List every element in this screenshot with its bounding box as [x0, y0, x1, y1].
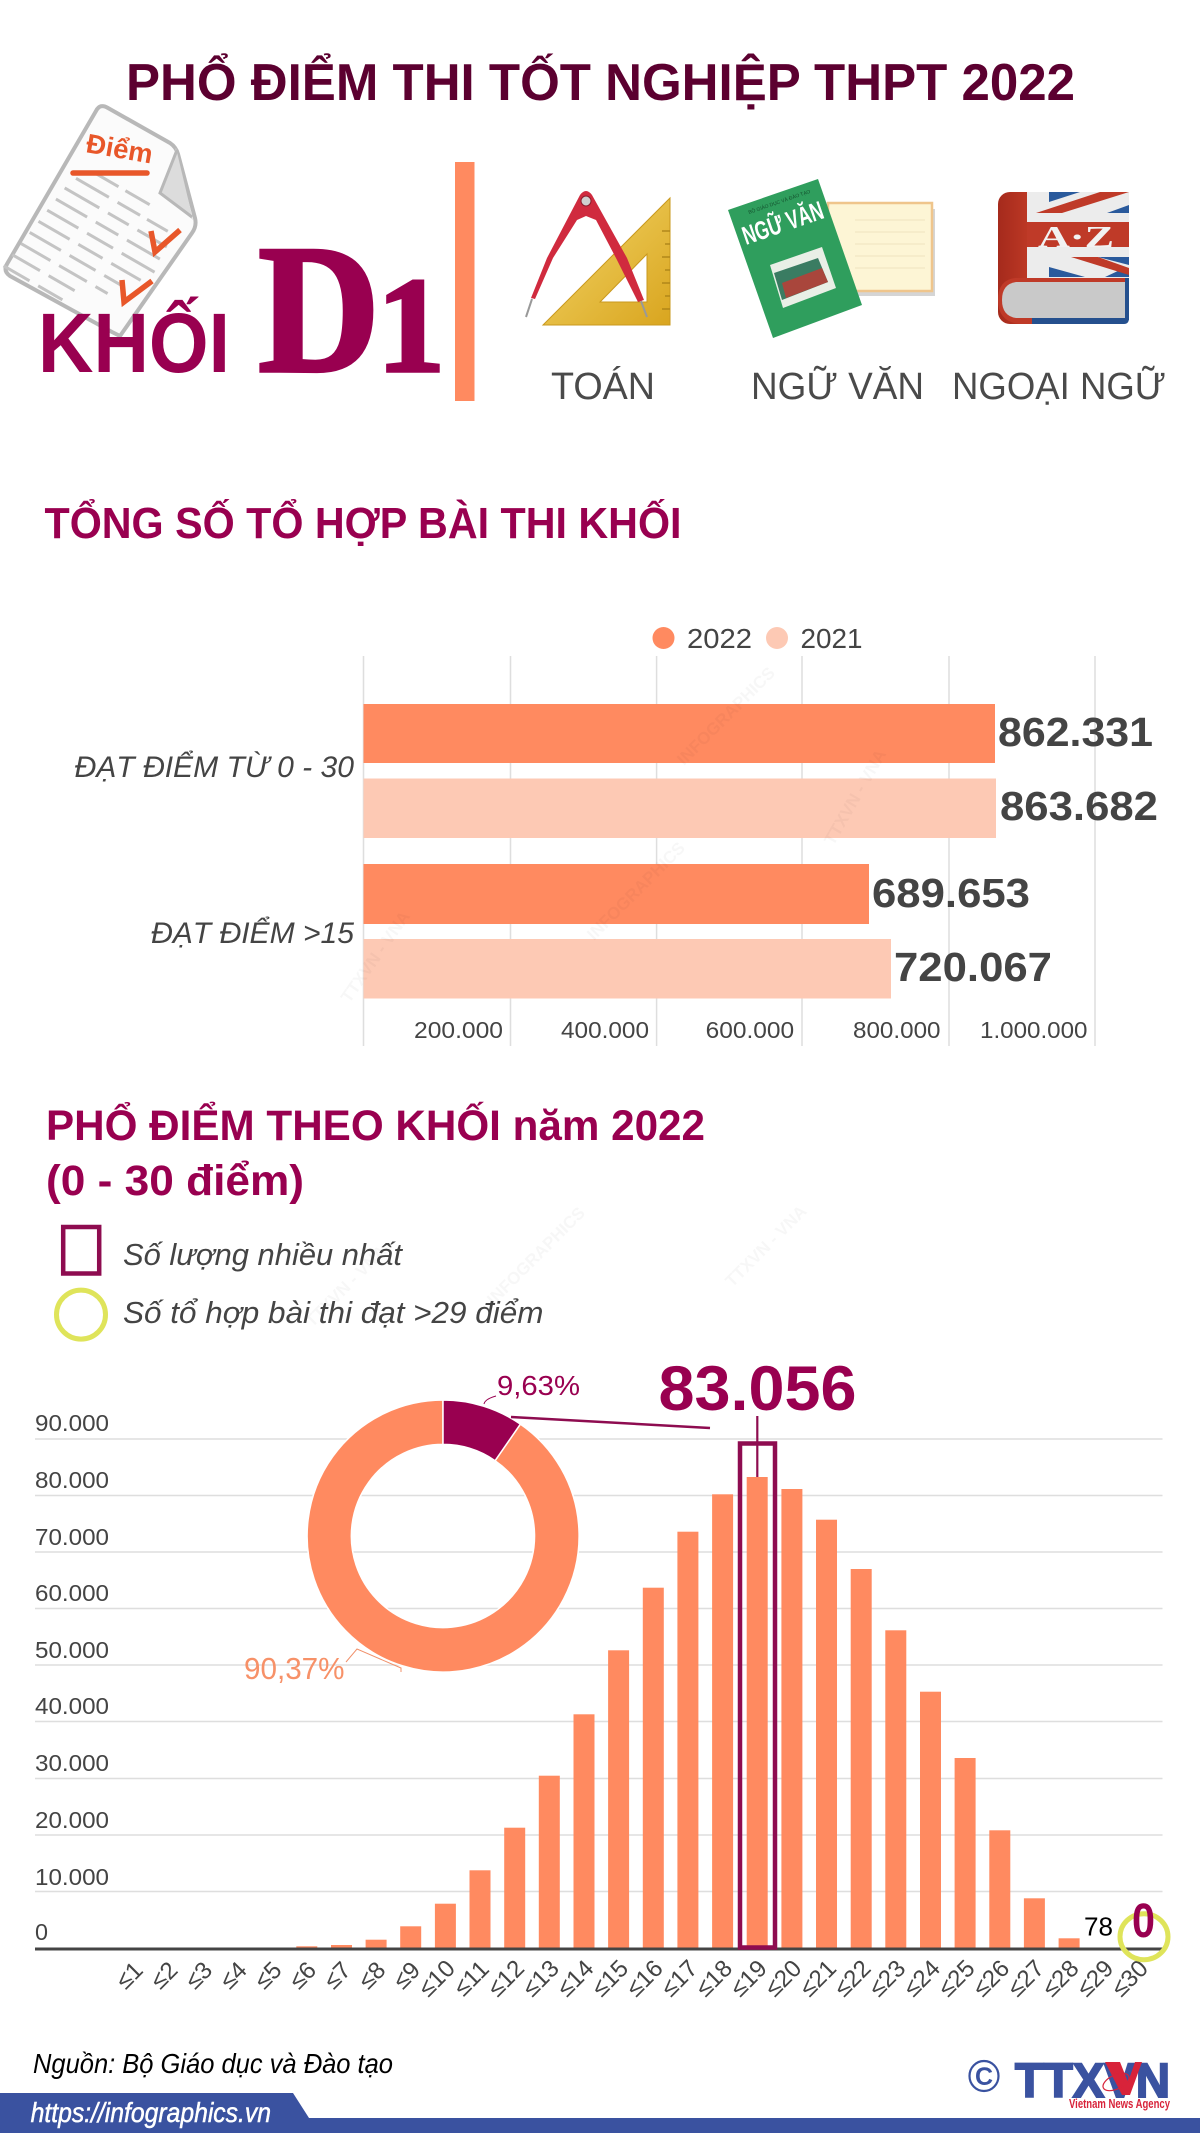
legend: highest count [63, 1227, 403, 1274]
y axis labels: 80.000 [35, 1467, 109, 1493]
bars [296, 1477, 1080, 1949]
label: 90,37% [244, 1649, 401, 1686]
icon: ruler and compass [526, 191, 670, 325]
x axis tick labels: ≤13 [517, 1955, 565, 2002]
group: scores 0-30: ĐẠT ĐIỂM TỪ 0 - 30 [74, 750, 354, 784]
x axis tick labels: ≤6 [284, 1957, 322, 1995]
y axis labels: 60.000 [35, 1580, 109, 1606]
text: TTXVN - VNA [820, 746, 890, 848]
marker: zero at 30 points [1120, 1895, 1168, 1960]
connector line to peak [511, 1417, 710, 1428]
x axis tick labels: ≤2 [145, 1957, 183, 1995]
title: PHỔ ĐIỂM THI TỐT NGHIỆP THPT 2022 [126, 53, 1075, 112]
heading: score distribution: PHỔ ĐIỂM THEO KHỐI năm 2022 [46, 1100, 705, 1150]
label: 9,63%: 9,63% [497, 1370, 580, 1401]
x axis tick labels: ≤14 [552, 1955, 599, 2002]
bar chart: total combinations by year [74, 656, 1158, 1046]
x axis tick labels: ≤27 [1002, 1955, 1050, 2002]
column chart: score distribution [35, 1410, 1168, 2002]
copyright mark: C [975, 2063, 993, 2091]
text: INFOGRAPHICS [583, 838, 689, 944]
label: 90,37%: 90,37% [244, 1651, 344, 1686]
x axis tick labels: ≤9 [388, 1957, 426, 1995]
y axis labels: 30.000 [35, 1750, 109, 1776]
x axis tick labels: ≤12 [483, 1955, 530, 2002]
marker: zero at 30 points: 0 [1132, 1895, 1155, 1948]
legend: years: 2021 [800, 623, 862, 654]
x axis tick labels: ≤15 [587, 1955, 634, 2002]
x axis tick labels: ≤25 [933, 1955, 980, 2002]
logo: TTXVN: Vietnam News Agency [1069, 2097, 1170, 2111]
x axis tick labels: ≤30 [1106, 1955, 1154, 2002]
x axis tick labels: ≤1 [111, 1957, 149, 1995]
y axis labels: 90.000 [35, 1410, 109, 1436]
text: INFOGRAPHICS [673, 663, 779, 769]
heading: KHỐI D1 [38, 207, 445, 411]
group: scores 0-30: 862.331 [998, 709, 1153, 755]
value: 78: 78 [1084, 1912, 1113, 1942]
heading: score distribution: (0 - 30 điểm) [46, 1157, 304, 1205]
icon: English dictionary: A·Z [1038, 219, 1114, 254]
vertical divider bar [455, 162, 474, 401]
y axis labels: 40.000 [35, 1693, 109, 1719]
group: scores 0-30: 863.682 [1000, 783, 1158, 829]
heading: KHỐI D1: D [258, 207, 380, 411]
x axis tick labels: ≤16 [621, 1955, 669, 2002]
heading: score distribution [46, 1100, 705, 1205]
icon: literature textbook [728, 179, 935, 338]
x axis tick labels: ≤22 [829, 1955, 876, 2002]
text: TTXVN - VNA [722, 1202, 811, 1291]
x axis tick labels [111, 1955, 1154, 2002]
highlight: peak column frame [740, 1444, 775, 1948]
group: scores above 15 [151, 864, 1052, 998]
icon: exam paper [4, 106, 196, 336]
copyright mark [970, 2061, 998, 2091]
x axis tick labels: ≤5 [249, 1957, 287, 1995]
icon: literature textbook: BỘ GIÁO DỤC VÀ ĐÀO TẠO [747, 188, 811, 216]
x axis tick labels: ≤26 [968, 1955, 1015, 2002]
footer url: https://infographics.vn [31, 2097, 271, 2128]
y axis labels: 10.000 [35, 1864, 109, 1890]
x axis tick labels: ≤23 [864, 1955, 911, 2002]
logo: TTXVN: TTXVN [1015, 2055, 1170, 2108]
icon: exam paper: Điểm [84, 128, 155, 170]
x axis tick labels: ≤10 [413, 1955, 461, 2002]
heading: KHỐI D1: KHỐI [38, 296, 230, 390]
group: scores above 15: 720.067 [894, 944, 1052, 990]
x axis labels [414, 1017, 1088, 1043]
subject: literature [728, 179, 935, 408]
text: TTXVN - VNA [337, 908, 414, 1006]
heading: KHỐI D1: 1 [377, 251, 445, 401]
source note: Nguồn: Bộ Giáo dục và Đào tạo [33, 2048, 393, 2079]
group: scores 0-30 [74, 704, 1158, 838]
y axis labels: 70.000 [35, 1524, 109, 1550]
callout: peak value 83.056: 83.056 [658, 1354, 856, 1424]
group: scores above 15: 689.653 [872, 870, 1030, 916]
y axis labels [35, 1410, 109, 1945]
legend: highest count: Số lượng nhiều nhất [123, 1237, 403, 1272]
x axis labels: 600.000 [706, 1017, 794, 1043]
heading: total combinations: TỔNG SỐ TỔ HỢP BÀI THI KHỐI [44, 497, 682, 548]
x axis tick labels: ≤24 [898, 1955, 946, 2002]
x axis tick labels: ≤28 [1037, 1955, 1084, 2002]
x axis tick labels: ≤20 [760, 1955, 807, 2002]
x axis tick labels: ≤17 [656, 1955, 703, 2002]
x axis tick labels: ≤11 [449, 1956, 495, 2002]
x axis tick labels: ≤8 [353, 1957, 391, 1995]
label: Toán: TOÁN [551, 365, 655, 408]
group: scores above 15: ĐẠT ĐIỂM >15 [151, 916, 354, 950]
x axis tick labels: ≤3 [180, 1957, 218, 1995]
y axis labels: 20.000 [35, 1807, 109, 1833]
legend: above 29 points [56, 1290, 544, 1339]
y axis labels: 0 [35, 1919, 48, 1945]
legend: years: 2022 [687, 623, 752, 654]
y axis labels: 50.000 [35, 1637, 109, 1663]
x axis labels: 800.000 [853, 1017, 940, 1043]
legend: years [652, 623, 862, 654]
label: Ngữ văn: NGỮ VĂN [751, 364, 924, 408]
icon: English dictionary [998, 192, 1129, 324]
label: Ngoại ngữ: NGOẠI NGỮ [952, 364, 1166, 408]
x axis tick labels: ≤19 [725, 1955, 773, 2002]
legend: above 29 points: Số tổ hợp bài thi đạt >29 điểm [123, 1295, 544, 1330]
x axis tick labels: ≤7 [319, 1957, 357, 1995]
donut chart: share of top score [244, 1370, 710, 1686]
x axis labels: 400.000 [561, 1017, 649, 1043]
x axis labels: 200.000 [414, 1017, 503, 1043]
text: TTXVN - VNA [302, 1242, 391, 1331]
footer bar [0, 2093, 1200, 2133]
subject: foreign language [952, 192, 1166, 408]
x axis tick labels: ≤18 [691, 1955, 738, 2002]
icon: literature textbook: NGỮ VĂN [738, 195, 827, 251]
x axis labels: 1.000.000 [980, 1017, 1088, 1043]
text: INFOGRAPHICS [483, 1203, 589, 1309]
x axis tick labels: ≤29 [1072, 1955, 1119, 2002]
x axis tick labels: ≤4 [215, 1957, 253, 1995]
baseline axis [35, 1948, 1162, 1950]
x axis tick labels: ≤21 [795, 1955, 842, 2002]
subject: math [526, 191, 670, 408]
